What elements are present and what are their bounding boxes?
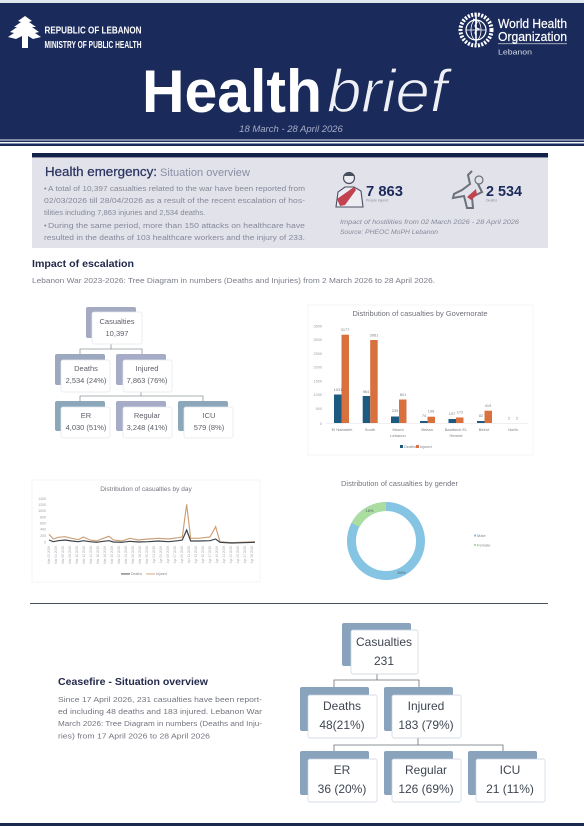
chart legend: Male — [477, 533, 486, 538]
line: injured — [49, 504, 255, 543]
node: ER — [55, 401, 110, 438]
date axis labels: Apr 17 2026 — [208, 546, 212, 563]
node: ER: 4,030 (51%) — [66, 423, 107, 432]
category labels: Baalbeck El- — [445, 427, 468, 432]
date axis labels: Mar 08 2026 — [68, 546, 72, 564]
node: casualties: 231 — [374, 654, 394, 668]
ministry name: REPUBLIC OF LEBANON — [44, 24, 142, 36]
bar value labels: 137 — [449, 411, 455, 416]
node: ICU — [178, 401, 233, 438]
stat: people injured: 7 863 — [366, 183, 403, 200]
node: casualties: 10,397 — [106, 329, 128, 338]
bars: injured — [342, 335, 492, 423]
source note: Impact of hostilities from 02 March 2026 - 28 April 2026 — [340, 219, 519, 226]
bar value labels: 198 — [428, 408, 434, 414]
y axis labels — [314, 324, 322, 426]
category labels: Hermel — [450, 433, 463, 438]
chart legend: Deaths — [404, 445, 416, 449]
date axis labels: Mar 04 2026 — [54, 546, 58, 564]
subheading: tree diagram caption: Lebanon War 2023-2026: Tree Diagram in numbers (Deaths and Injuries) from 2 March 2026 to 28 April 2026. — [32, 276, 435, 285]
node: deaths: Deaths — [323, 699, 361, 713]
date axis labels: Apr 15 2026 — [201, 546, 205, 563]
ministry name — [44, 24, 142, 51]
y axis labels: 3500 — [314, 324, 322, 328]
date axis labels: Mar 06 2026 — [61, 546, 65, 564]
node: casualties: Casualties — [99, 317, 135, 326]
icon: chalk outline victim — [453, 171, 483, 208]
overview bullet text: 02/03/2026 till 28/04/2026 as a result of the recent escalation of hos- — [44, 196, 306, 205]
line chart: casualties by day — [32, 480, 260, 582]
bar value labels: 2 — [516, 416, 518, 420]
date axis labels: Mar 12 2026 — [82, 546, 86, 564]
node: regular: 3,248 (41%) — [127, 423, 168, 432]
node: ER — [300, 751, 377, 802]
node: regular: Regular — [134, 411, 161, 420]
title: Health brief — [142, 58, 452, 125]
node: regular: 126 (69%) — [398, 782, 454, 796]
overview bullet text — [44, 184, 306, 242]
ministry name: MINISTRY OF PUBLIC HEALTH — [44, 39, 142, 51]
y axis labels: 0 — [320, 422, 322, 426]
section divider — [30, 603, 548, 604]
title: Health brief: brief — [327, 58, 452, 125]
node: regular: Regular — [405, 763, 447, 777]
overview bullet text: • — [44, 221, 47, 230]
bar value labels: 801 — [400, 392, 406, 397]
chart legend: Female — [477, 542, 491, 548]
category labels: Mount — [392, 427, 404, 432]
source note: Source: PHEOC MoPH Lebanon — [340, 229, 438, 236]
donut labels: 84% — [397, 570, 406, 575]
ceasefire body text: ries) from 17 April 2026 to 28 April 2026 — [58, 732, 210, 740]
date axis labels: Mar 02 2026 — [47, 546, 51, 564]
node: injured: 7,863 (76%) — [127, 376, 168, 385]
overview bullet text: During the same period, more than 150 attacks on healthcare have — [48, 221, 305, 230]
y axis labels: 1200 — [38, 503, 46, 507]
node: deaths: Deaths — [74, 364, 98, 373]
overview bullet text: tilities including 7,863 injuries and 2,534 deaths. — [44, 208, 205, 217]
node: ICU: 21 (11%) — [486, 782, 534, 796]
icon: WHO emblem — [460, 13, 492, 46]
y axis labels: 1500 — [314, 380, 322, 384]
y axis labels: 1000 — [38, 509, 46, 513]
node: injured — [116, 354, 172, 392]
y axis labels: 600 — [40, 522, 46, 526]
panel heading — [45, 164, 250, 179]
date axis labels: Apr 23 2026 — [229, 546, 233, 563]
ceasefire body text: ed including 48 deaths and 183 injured. Lebanon War — [58, 707, 263, 716]
node: deaths — [55, 354, 110, 392]
date axis labels: Mar 18 2026 — [103, 546, 107, 564]
donut labels — [365, 508, 406, 575]
icon: injured person — [336, 172, 363, 207]
organization name: Lebanon — [498, 48, 532, 56]
date axis labels: Apr 21 2026 — [222, 546, 226, 563]
panel: health emergency situation overview — [32, 153, 548, 248]
node: ICU: ICU — [203, 411, 215, 420]
stat: deaths: 2 534 — [486, 183, 523, 200]
y axis labels: 0 — [44, 540, 46, 544]
y axis labels: 3000 — [314, 338, 322, 342]
panel heading: Situation overview — [160, 167, 250, 179]
y axis labels: 800 — [40, 516, 46, 520]
node: casualties: Casualties — [356, 635, 412, 649]
bar value labels: 1031 — [334, 387, 342, 392]
logo: ministry of public health — [8, 16, 142, 51]
header banner — [0, 0, 584, 146]
heading: impact of escalation: Impact of escalation — [32, 258, 134, 270]
y axis labels: 2000 — [314, 366, 322, 370]
chart title: Distribution of casualties by day — [100, 486, 192, 493]
bar value labels: 74 — [422, 413, 427, 418]
bar chart: casualties by governorate — [308, 305, 533, 455]
y axis labels — [38, 497, 46, 544]
category labels: Beirut — [479, 427, 490, 432]
donut labels: 16% — [365, 508, 374, 513]
heading: ceasefire situation overview: Ceasefire - Situation overview — [58, 676, 209, 688]
overview bullet text: A total of 10,397 casualties related to the war have been reported from — [48, 184, 305, 193]
y axis labels: 1000 — [314, 393, 322, 397]
chart legend — [400, 445, 432, 449]
node: deaths: 48(21%) — [319, 718, 365, 732]
organization name — [498, 17, 567, 56]
overview bullet text: • — [44, 184, 47, 193]
node: injured: Injured — [408, 699, 444, 713]
node: ER: ER — [81, 411, 92, 420]
node: deaths — [300, 687, 377, 738]
category labels: North — [508, 427, 518, 432]
date axis labels — [47, 546, 254, 564]
date axis labels: Apr 13 2026 — [194, 546, 198, 563]
bar value labels: 2 — [508, 416, 510, 420]
bar value labels: 3177 — [341, 327, 349, 332]
stat: people injured: People injured — [366, 198, 388, 202]
bar value labels: 172 — [457, 410, 463, 414]
bar value labels: 419 — [485, 403, 491, 408]
donut chart: casualties by gender — [341, 481, 491, 576]
bars: deaths — [334, 394, 484, 423]
footer bar — [0, 823, 584, 826]
node: ICU: 579 (8%) — [194, 423, 225, 432]
date axis labels: Apr 09 2026 — [180, 546, 184, 563]
node: casualties — [342, 623, 418, 674]
date axis labels: Mar 20 2026 — [110, 546, 114, 564]
node: injured — [384, 687, 461, 738]
tree diagram: escalation casualties — [55, 307, 233, 438]
date axis labels: Mar 26 2026 — [131, 546, 135, 564]
icon: cedar — [8, 16, 41, 48]
organization name: Organization — [498, 30, 567, 44]
chart legend: Deaths — [131, 572, 142, 576]
date axis labels: Apr 07 2026 — [173, 546, 177, 563]
category labels: Bekaa — [421, 427, 433, 432]
node: ICU — [468, 751, 545, 802]
ceasefire body text: March 2026: Tree Diagram in numbers (Deaths and Inju- — [58, 719, 263, 728]
date range: 18 March - 28 April 2026 — [239, 124, 344, 135]
date axis labels: Apr 03 2026 — [159, 546, 163, 563]
ceasefire body text — [58, 695, 263, 740]
date axis labels: Mar 30 2026 — [145, 546, 149, 564]
logo: World Health Organization — [460, 13, 567, 56]
line: deaths — [49, 530, 255, 543]
y axis labels: 200 — [40, 534, 46, 538]
y axis labels: 400 — [40, 528, 46, 532]
chart legend: Injured — [156, 572, 167, 576]
category labels: El Nabatieh — [332, 427, 352, 432]
node: casualties — [86, 307, 142, 344]
donut ring: female — [356, 506, 386, 525]
y axis labels: 2500 — [314, 352, 322, 356]
panel heading: Health emergency: — [45, 164, 157, 179]
date axis labels: Mar 10 2026 — [75, 546, 79, 564]
node: ER: 36 (20%) — [318, 782, 366, 796]
date axis labels: Mar 28 2026 — [138, 546, 142, 564]
date axis labels: Mar 16 2026 — [96, 546, 100, 564]
node: injured: Injured — [136, 364, 158, 373]
date axis labels: Apr 11 2026 — [187, 546, 191, 563]
date axis labels: Mar 24 2026 — [124, 546, 128, 564]
node: ICU: ICU — [500, 763, 520, 777]
chart title: Distribution of casualties by Governorate — [352, 309, 488, 318]
overview bullet text: resulted in the deaths of 103 healthcare workers and the injury of 233. — [44, 233, 305, 242]
category labels: Lebanon — [390, 433, 406, 438]
date axis labels: Apr 28 2026 — [250, 546, 254, 563]
date axis labels: Mar 14 2026 — [89, 546, 93, 564]
category labels — [332, 427, 518, 438]
chart legend: Injured — [420, 445, 432, 449]
date axis labels: Mar 22 2026 — [117, 546, 121, 564]
title: Health brief: Health — [142, 58, 322, 125]
node: deaths: 2,534 (24%) — [66, 376, 107, 385]
chart title: Distribution of casualties by gender — [341, 481, 459, 488]
chart legend — [121, 572, 167, 576]
node: regular — [384, 751, 461, 802]
y axis labels: 1400 — [38, 497, 46, 501]
bar value labels — [334, 327, 518, 420]
bar value labels: 964 — [363, 389, 370, 394]
date axis labels: Apr 05 2026 — [166, 546, 170, 563]
date axis labels: Apr 27 2026 — [243, 546, 247, 563]
bar value labels: 82 — [479, 413, 483, 418]
date axis labels: Apr 25 2026 — [236, 546, 240, 563]
tree diagram: ceasefire casualties — [300, 623, 545, 802]
category labels: South — [365, 427, 375, 432]
date axis labels: Apr 01 2026 — [152, 546, 156, 563]
node: regular — [116, 401, 172, 438]
stat: deaths: Deaths — [486, 198, 497, 202]
chart legend — [474, 533, 491, 548]
node: ER: ER — [334, 763, 351, 777]
date axis labels: Apr 19 2026 — [215, 546, 219, 563]
organization name: World Health — [498, 17, 567, 31]
y axis labels: 500 — [316, 407, 322, 411]
bar value labels: 235 — [392, 408, 398, 413]
source note — [340, 219, 519, 236]
node: injured: 183 (79%) — [398, 718, 454, 732]
donut ring: male — [352, 506, 420, 576]
bar value labels: 3061 — [370, 332, 378, 338]
ceasefire body text: Since 17 April 2026, 231 casualties have been report- — [58, 695, 263, 704]
